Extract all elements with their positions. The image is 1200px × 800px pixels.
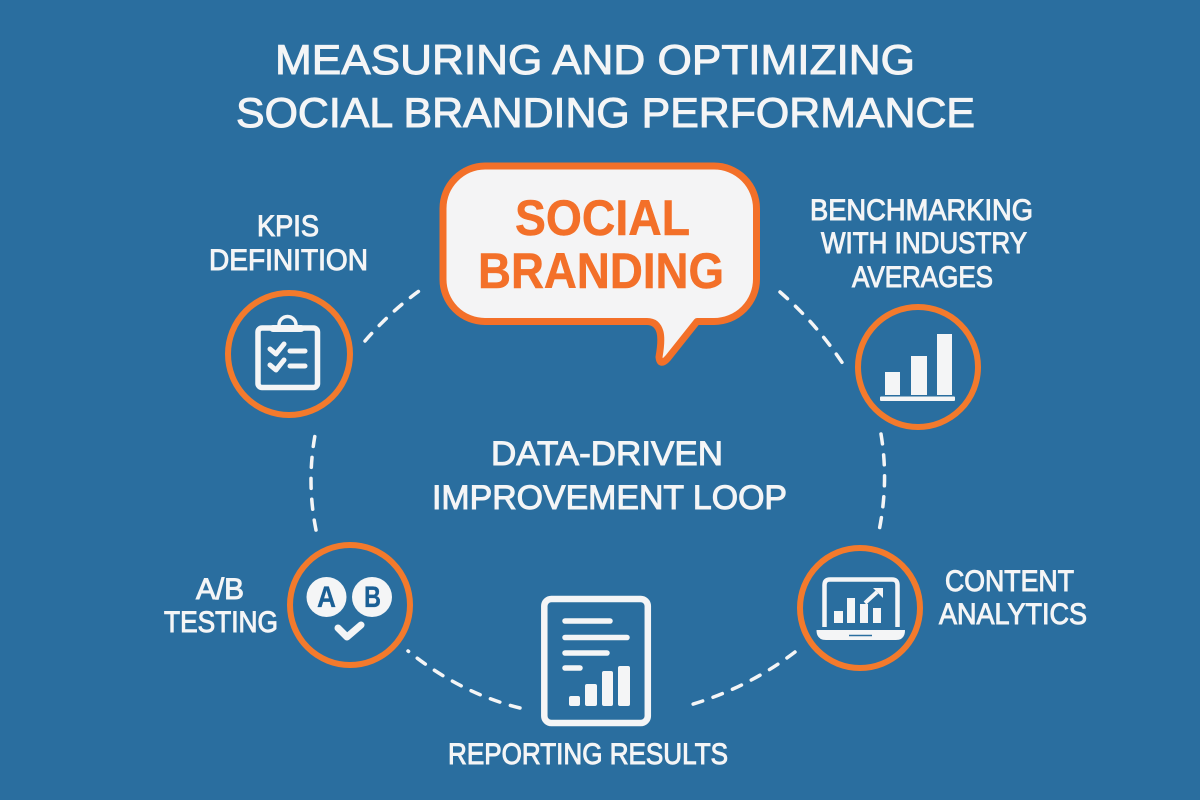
icon: A/B test with check: B [364,581,381,614]
node: reporting results [448,599,728,771]
icon: A/B test with check: A [317,581,336,614]
title: MEASURING AND OPTIMIZING [275,36,915,83]
label: KPIs definition: DEFINITION [209,244,368,277]
center text [432,435,787,517]
node: KPIs definition [209,210,368,415]
label: benchmarking with industry averages: WITH INDUSTRY [821,227,1027,260]
center text: IMPROVEMENT LOOP [432,479,787,517]
speech bubble: social branding: BRANDING [478,243,724,299]
title [236,36,975,136]
label: content analytics [939,565,1087,631]
ring [800,548,920,668]
label: KPIs definition: KPIS [257,210,319,243]
icon: clipboard checklist [258,316,318,388]
label: benchmarking with industry averages [810,194,1033,294]
label: content analytics: CONTENT [945,565,1074,598]
ring [858,307,978,427]
title: SOCIAL BRANDING PERFORMANCE [236,89,975,136]
icon: laptop analytics [816,580,905,640]
node: content analytics [800,548,1087,668]
label: reporting results: REPORTING RESULTS [448,738,728,771]
label: A/B testing: TESTING [164,606,278,639]
icon: A/B test with check [306,577,392,637]
label: KPIs definition [209,210,368,277]
icon: report document [544,599,648,723]
speech bubble: social branding [443,166,756,362]
center text: DATA-DRIVEN [491,435,723,473]
node: A/B testing [164,545,410,665]
speech bubble: social branding: SOCIAL [515,190,690,246]
label: A/B testing: A/B [196,573,244,606]
icon: bar chart [880,334,955,401]
label: A/B testing [164,573,278,639]
dashed improvement loop [311,291,885,708]
node: benchmarking [810,194,1033,427]
label: content analytics: ANALYTICS [939,598,1087,631]
ring [290,545,410,665]
label: benchmarking with industry averages: BENCHMARKING [810,194,1033,227]
ring [228,293,350,415]
label: benchmarking with industry averages: AVERAGES [852,261,993,294]
